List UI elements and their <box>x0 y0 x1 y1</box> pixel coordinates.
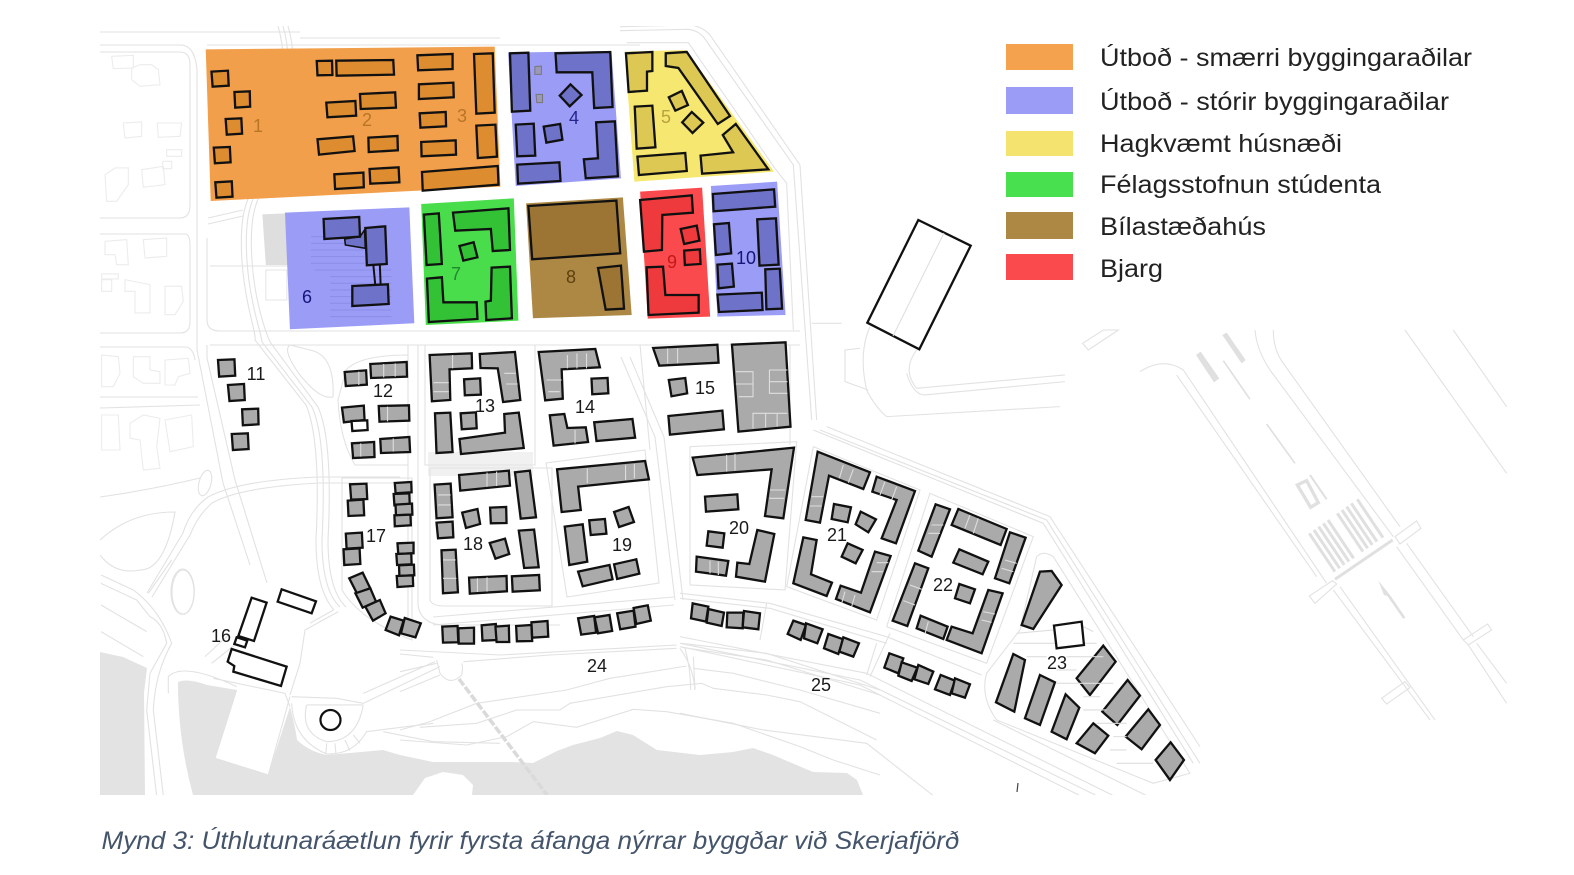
legend: Bjarg: Bjarg <box>1100 255 1163 283</box>
road network, south-centre shore paths <box>400 643 880 775</box>
grey buildings: plots 20-25 east <box>691 448 1184 780</box>
plot 1-3: small developers (orange) <box>206 47 500 201</box>
black plot numbers 11-25: 24 <box>587 656 607 676</box>
black plot numbers 11-25: 14 <box>575 397 595 417</box>
coloured plot numbers 1-10 <box>253 106 756 307</box>
road and runway markings <box>1083 330 1507 720</box>
hatched forecourt between plots 13 and 18 <box>428 452 533 476</box>
black plot numbers 11-25: 18 <box>463 534 483 554</box>
black plot numbers 11-25: 17 <box>366 526 386 546</box>
black plot numbers 11-25: 11 <box>247 364 265 384</box>
legend: student housing: Félagsstofnun stúdenta <box>1100 171 1381 199</box>
coloured plot numbers 1-10: 6 <box>302 287 312 307</box>
black plot numbers 11-25 <box>211 364 1067 695</box>
plot 7: student housing (green) <box>421 198 518 325</box>
road network, north and west <box>100 26 800 640</box>
black plot numbers 11-25: 22 <box>933 575 953 595</box>
plot 6: large developers (blue) <box>262 207 414 329</box>
legend: parking garage: Bílastæðahús <box>1100 213 1266 241</box>
plot 5: affordable housing (yellow) <box>625 50 774 182</box>
road network, north-east <box>620 25 1065 420</box>
black plot numbers 11-25: 12 <box>373 381 393 401</box>
legend: Bjarg <box>1006 254 1163 283</box>
coloured plot numbers 1-10: 2 <box>362 110 372 130</box>
road network, harbour and plot 16 <box>101 560 500 796</box>
black plot numbers 11-25: 23 <box>1047 653 1067 673</box>
coloured plot numbers 1-10: 10 <box>736 248 756 268</box>
plot 9: Bjarg (red) <box>640 188 710 319</box>
legend: small developers: Útboð - smærri byggingaraðilar <box>1100 43 1472 72</box>
site plan map <box>100 25 1507 796</box>
coloured plot numbers 1-10: 8 <box>566 267 576 287</box>
outlined reserve plot in the east <box>867 220 971 349</box>
figure caption: Mynd 3: Úthlutunaráætlun fyrir fyrsta áfanga nýrrar byggðar við Skerjafjörð <box>102 826 960 855</box>
legend: large developers: Útboð - stórir byggingaraðilar <box>1100 87 1449 116</box>
faint neighbouring houses, upper <box>102 55 183 315</box>
grey buildings: plots 11-19 and 24 west <box>218 342 791 644</box>
bridge walkway <box>459 679 547 795</box>
coloured plot numbers 1-10: 4 <box>569 108 579 128</box>
coloured plot numbers 1-10: 1 <box>253 116 263 136</box>
white outlined buildings: plot 16 <box>228 589 316 686</box>
black plot numbers 11-25: 21 <box>827 525 847 545</box>
coloured plot numbers 1-10: 7 <box>451 264 461 284</box>
coloured plot numbers 1-10: 5 <box>661 107 671 127</box>
black plot numbers 11-25: 25 <box>811 675 831 695</box>
legend: affordable housing: Hagkvæmt húsnæði <box>1100 130 1342 158</box>
coloured plot numbers 1-10: 3 <box>457 106 467 126</box>
plot 4: large developers (blue) <box>508 51 621 186</box>
plot 10: large developers (blue) <box>711 182 786 317</box>
white building at plot 23 <box>1054 622 1084 648</box>
black plot numbers 11-25: 16 <box>211 626 231 646</box>
legend: parking garage <box>1006 212 1266 241</box>
legend: student housing <box>1006 171 1381 199</box>
faint neighbouring houses, lower <box>102 355 193 470</box>
road network, south-east <box>680 427 1200 796</box>
small survey mark <box>1017 783 1018 792</box>
black plot numbers 11-25: 15 <box>695 378 715 398</box>
circular structure <box>320 710 340 730</box>
plot 8: parking garage (brown) <box>526 197 632 318</box>
water and shoreline <box>100 652 863 795</box>
coloured plot numbers 1-10: 9 <box>667 252 677 272</box>
black plot numbers 11-25: 19 <box>612 535 632 555</box>
legend: affordable housing <box>1006 130 1342 158</box>
legend <box>1006 43 1472 283</box>
black plot numbers 11-25: 20 <box>729 518 749 538</box>
black plot numbers 11-25: 13 <box>475 396 495 416</box>
